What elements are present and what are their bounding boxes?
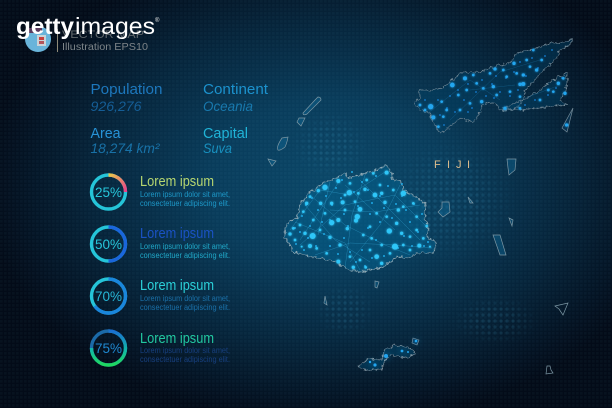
map label: Fiji: J bbox=[456, 159, 462, 171]
stat row: 50%: consectetuer adipiscing elit. bbox=[140, 251, 230, 260]
country facts: Area bbox=[90, 125, 121, 142]
small nodes bbox=[425, 50, 562, 125]
stat row: 75% bbox=[92, 330, 230, 365]
ring chart 50%: 50% bbox=[95, 237, 122, 252]
stat row: 70%: Lorem ipsum bbox=[140, 277, 214, 294]
stat row: 75%: Lorem ipsum dolor sit amet, bbox=[140, 346, 230, 355]
map: northern island Vanua Levu bbox=[414, 38, 573, 133]
flag emblem bbox=[25, 26, 51, 52]
country facts: Oceania bbox=[203, 98, 253, 114]
ring chart 70%: 70% bbox=[95, 289, 122, 304]
subtitle behind watermark bbox=[57, 29, 148, 53]
country facts bbox=[90, 81, 269, 156]
country facts: Population bbox=[90, 81, 162, 98]
map: main island Viti Levu bbox=[285, 165, 437, 272]
map label: Fiji: F bbox=[434, 159, 441, 171]
stat row: 50% bbox=[92, 225, 230, 261]
stat row: 70%: consectetuer adipiscing elit. bbox=[140, 303, 230, 312]
stat row: 50%: Lorem ipsum bbox=[140, 225, 214, 242]
stat row: 25% bbox=[92, 173, 230, 209]
map: small islands bbox=[268, 97, 568, 374]
country facts: Capital bbox=[203, 125, 248, 142]
country facts: 926,276 bbox=[90, 98, 142, 114]
ring chart 75%: 75% bbox=[95, 341, 122, 356]
small nodes bbox=[295, 172, 428, 266]
watermark logo: ® bbox=[155, 17, 160, 24]
stat row: 25%: consectetuer adipiscing elit. bbox=[140, 199, 230, 208]
stat row: 70% bbox=[92, 277, 230, 313]
map: southern island Kadavu bbox=[358, 338, 419, 370]
stat row: 50%: Lorem ipsum dolor sit amet, bbox=[140, 242, 230, 251]
map label: Fiji bbox=[434, 159, 470, 171]
watermark logo bbox=[16, 13, 160, 39]
stat row: 70%: Lorem ipsum dolor sit amet, bbox=[140, 294, 230, 303]
stat row: 75%: consectetuer adipiscing elit. bbox=[140, 355, 230, 364]
map label: Fiji: I bbox=[447, 159, 450, 171]
country facts: Suva bbox=[203, 140, 232, 156]
subtitle behind watermark: Illustration EPS10 bbox=[62, 42, 148, 53]
ring chart 25%: 25% bbox=[95, 185, 122, 200]
country facts: Continent bbox=[203, 81, 269, 98]
stat row: 75%: Lorem ipsum bbox=[140, 330, 214, 347]
watermark logo: images bbox=[75, 13, 155, 39]
watermark logo: getty bbox=[16, 13, 74, 39]
country facts: 18,274 km² bbox=[90, 140, 161, 156]
stat row: 25%: Lorem ipsum bbox=[140, 173, 214, 190]
subtitle behind watermark: VECTOR MAP bbox=[62, 29, 144, 41]
map label: Fiji: I bbox=[467, 159, 470, 171]
stat row: 25%: Lorem ipsum dolor sit amet, bbox=[140, 190, 230, 199]
